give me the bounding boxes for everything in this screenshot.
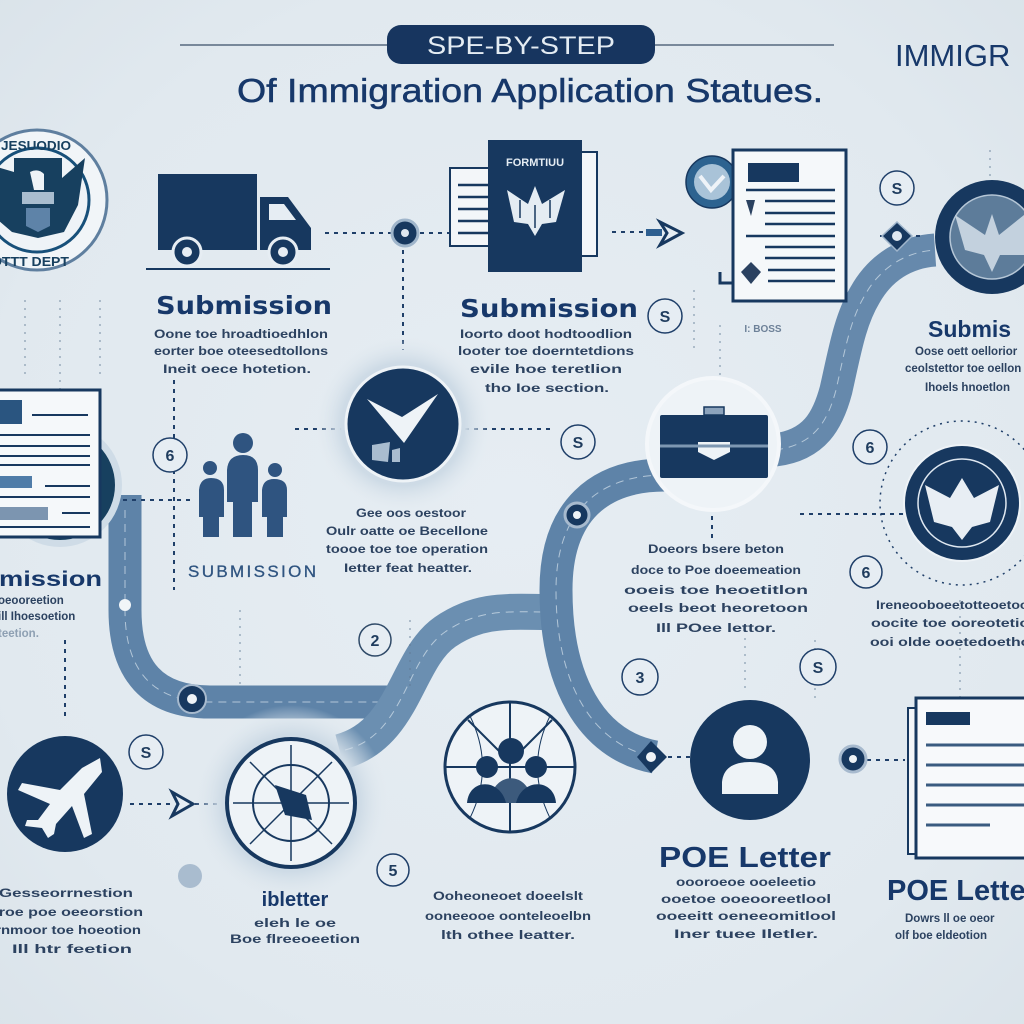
badge 5 [377,854,409,886]
text block center: Ill POee lettor. [656,623,776,635]
badge 6 lower [850,556,882,588]
text block 2: tho Ioe section. [485,383,609,395]
badge small [178,864,202,888]
icon: compass [193,705,389,901]
heading: submission family: SUBMISSION [188,562,316,581]
badge 2: 2 [371,633,380,650]
text block 2: Ioorto doot hodtoodlion [460,329,632,341]
text block right lower [870,600,1024,649]
text block 2: evile hoe teretlion [470,364,622,376]
title: Of Immigration Application Statues. [237,72,823,109]
heading: submission 2: Submission [460,294,638,323]
text block right lower: oocite toe ooreotetion [871,618,1024,630]
arrow plane [172,792,193,816]
caption: I: BOSS [744,324,782,335]
text block plane: Ill htr feetion [12,944,132,956]
badge 3: 3 [636,670,645,687]
route nodes [119,503,866,773]
badge S plane: S [141,745,152,762]
cropped right heading: IMMIGR [895,38,1010,73]
heading: submission cropped left: mission [0,568,102,591]
icon: seal left [0,130,107,270]
text block center: Doeors bsere beton [648,544,784,556]
badge 6 [153,438,187,472]
heading: submission 1: Submission [156,291,332,320]
text block POE [656,877,836,941]
text block center [624,544,808,635]
heading: POE letter: POE Letter [659,842,831,874]
badge 6: 6 [166,448,175,465]
badge 6 lower: 6 [862,565,871,582]
text block middle: Gee oos oestoor [356,508,467,520]
text block plane: Gesseorrnestion [0,888,133,900]
text block compass: eleh le oe [254,918,336,930]
icon: plane [7,736,123,852]
route path: right [775,250,935,450]
text block people: Ooheoneoet doeelslt [433,891,583,903]
icon: arrow [646,222,682,245]
text block 1: eorter boe oteesedtollons [154,346,328,358]
text block middle [326,508,488,575]
connector lines [25,150,990,804]
text block compass: Boe flreeoeetion [230,934,360,946]
icon: shield circle [315,336,491,512]
text block center: oeels beot heoretoon [628,603,808,615]
title banner: SPE-BY-STEP [427,32,615,60]
route path: wave [340,612,548,752]
text block plane [0,888,143,956]
icon: truck [146,174,330,269]
route path: middle [556,475,665,757]
icon: document bottom right [908,698,1024,858]
icon: passport [450,140,597,272]
text block people: ooneeooe oonteleoelbn [425,911,591,923]
icon: passport: FORMTIUU [506,157,564,169]
text block middle: Oulr oatte oe Becellone [326,526,488,538]
text block right: ceolstettor toe oellon [905,363,1021,375]
badge 5: 5 [389,863,398,880]
badge 6 right [853,430,887,464]
badge S lower [800,649,836,685]
icon: person [690,700,810,820]
badge S right: S [892,181,903,198]
text block bottom right [895,913,995,942]
icon: eagle seal [880,421,1024,585]
icon: seal right [935,180,1024,294]
badge S: S [660,309,671,326]
text block people: lth othee leatter. [441,930,575,942]
node right [882,222,912,251]
badge 2 [359,624,391,656]
text block people [425,891,591,942]
text block 1: Oone toe hroadtioedhlon [154,329,328,341]
text block center: ooeis toe heoetitlon [624,585,808,597]
icon: seal left: JESUODIO [1,138,71,153]
icon: document [720,150,846,301]
text block compass [230,918,360,946]
route path: left [125,495,395,702]
badge 6 right: 6 [866,440,875,457]
text block POE: oooroeoe ooeleetio [676,877,816,889]
text block right: Oose oett oellorior [915,346,1018,358]
badge 3 [622,659,658,695]
heading: POE letter right: POE Lette [887,875,1024,907]
icon: people globe [445,702,575,832]
badge S lower: S [813,660,824,677]
text block POE: Iner tuee Iletler. [674,929,818,941]
badge S middle [561,425,595,459]
text block bottom right: Dowrs ll oe oeor [905,913,995,925]
text block left: ill Ihoesoetion [0,611,75,623]
text block 1: Ineit oece hotetion. [163,364,311,376]
text block POE: ooetoe ooeooreetlool [661,894,831,906]
text block right lower: ooi olde ooetedoethon [870,637,1024,649]
text block right: Ihoels hnoetlon [925,382,1010,394]
icon: check badge [686,156,738,208]
badge S right [880,171,914,205]
icon: family [199,433,287,537]
title banner [180,25,834,64]
text block POE: ooeeitt oeneeomitlool [656,911,836,923]
badge S [648,299,682,333]
text block right [905,346,1021,394]
text block bottom right: olf boe eldeotion [895,930,987,942]
icon: document left [0,390,122,547]
text block middle: toooe toe toe operation [326,544,488,556]
icon: briefcase [647,378,779,510]
text block right lower: Ireneooboeetotteoetoor [876,600,1024,612]
badge S plane [129,735,163,769]
icon: node 1 [392,220,418,246]
text block 1 [154,329,328,376]
heading: submission cropped: Submis [928,316,1011,342]
text block center: doce to Poe doeemeation [631,565,801,577]
text block middle: Ietter feat heatter. [344,563,472,575]
badge S middle: S [573,435,584,452]
text block left [0,595,75,640]
heading: letter: ibletter [262,889,329,911]
text block 2: looter toe doerntetdions [458,346,634,358]
text block 2 [458,329,634,395]
